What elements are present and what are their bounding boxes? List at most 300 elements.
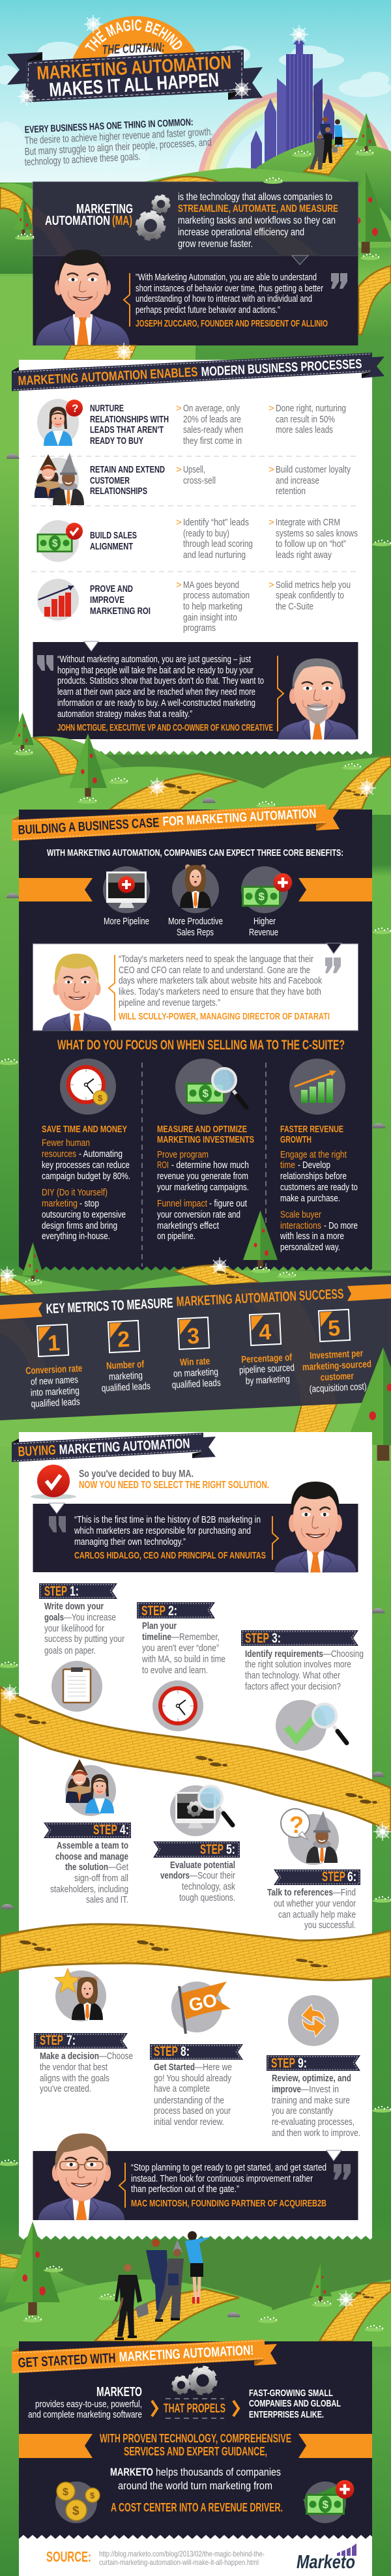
ribbon: step 2 [137,1602,215,1618]
definition text: is the technology that allows companies to [178,192,332,203]
metric 1 [23,1324,84,1410]
step 9: Review, optimize, and [272,2073,351,2084]
ribbon: step 2: STEP [141,1603,166,1618]
row: nurture relationships: can result in 50% [276,414,335,425]
step 8: Get Started [154,2062,195,2073]
benefit: higher revenue: Higher [253,916,276,927]
column: measure and optimize: Funnel impact [157,1198,208,1209]
row: retain and extend: cross-sell [183,475,216,486]
traveller: tin man in gray suit [155,2240,184,2320]
text: marketo provides: provides easy-to-use, powerful, [35,2399,142,2410]
text: fast-growing companies: ENTERPRISES ALIKE. [249,2409,324,2420]
step 6: out whether your vendor [274,1898,356,1909]
column: save time and money [42,1124,130,1242]
row: prove and improve ROI: IMPROVE [90,594,124,606]
step 2: you aren't ever “done” [142,1643,219,1654]
metric 5: Investment per [310,1348,364,1362]
sparkles on title [18,15,308,106]
column: faster revenue growth: - Develop [298,1160,330,1171]
row: build sales alignment: BUILD SALES [90,530,137,541]
banner: building a business case [12,804,340,841]
row: nurture relationships: more sales leads [276,424,333,435]
row: retain and extend: > [176,464,182,475]
title: the curtain: THE CURTAIN: [102,40,165,57]
title: marketing automation: MARKETING AUTOMATION [36,52,232,84]
banner: get started: GET STARTED WITH [18,2350,116,2371]
column: measure and optimize: Prove program [157,1149,209,1160]
column: save time and money: campaign budget by 80%. [42,1171,130,1182]
benefit: more productive sales reps [168,864,223,938]
road connector [64,345,136,360]
quote text [74,1515,266,1561]
row: prove and improve ROI [37,579,351,634]
column: measure and optimize: - determine how much [171,1160,249,1171]
metric 4: pipeline sourced [239,1362,295,1376]
quote text: which marketers are responsible for purchasing and [74,1526,251,1536]
intro text: EVERY BUSINESS HAS ONE THING IN COMMON: [24,117,194,136]
column: save time and money: resources [42,1149,76,1160]
source url: curtain-marketing-automation-will-make-it-all-happen.html [99,2558,259,2567]
ribbon: step 4: 4: [120,1822,129,1837]
row: retain and extend: CUSTOMER [90,475,130,486]
step 4: sign-off from all [74,1873,128,1884]
column: faster revenue growth: interactions [280,1220,321,1231]
row: nurture relationships: 20% of leads are [183,414,241,425]
metric 4: by marketing [245,1373,290,1387]
icon: money under magnifier [175,1059,246,1115]
heading: key metrics [46,1287,344,1317]
step 5: tough questions. [179,1892,235,1903]
step 3: than technology. What other [245,1670,340,1681]
step 1 [39,1583,124,1712]
column: measure and optimize: MEASURE AND OPTIMIZE [157,1124,247,1135]
column: measure and optimize: MARKETING INVESTMENTS [157,1134,254,1145]
ribbon: step 8: 8: [181,2044,190,2059]
step 1: goals on paper. [44,1645,96,1656]
text: marketo helps: A COST CENTER INTO A REVENUE DRIVER. [111,2501,283,2514]
step 4: stakeholders, including [50,1884,128,1895]
row: nurture relationships: Done right, nurturing [276,403,346,414]
quote text: “This is the first time in the history of B2B marketing in [74,1515,261,1525]
panel: source footer [19,2535,372,2576]
icon: team [65,1759,116,1816]
landscape: rolling hills bottom [0,2221,391,2347]
intro text: technology to achieve these goals. [24,151,141,168]
step 2: —Remember, [171,1632,220,1643]
text: marketo helps: helps thousands of companies [156,2466,281,2478]
row: prove and improve ROI: process automation [183,590,250,601]
icon: witch and tin man [35,453,84,505]
tree overlap [345,1347,391,1461]
rainbow [199,93,391,190]
metric 1: 1 [47,1330,61,1356]
column: measure and optimize: your marketing campaigns. [157,1182,249,1193]
quote text: learn at their own pace and be reached when they need more [57,687,255,697]
step 5: Evaluate potential [170,1860,235,1871]
metric 3: qualified leads [171,1377,221,1391]
intro text [24,117,213,168]
ribbon: step 1: STEP [44,1584,67,1599]
quote text: “Without marketing automation, you are just guessing – just [57,654,251,665]
bracket [119,2163,125,2208]
metric 5 [300,1308,373,1395]
row: prove and improve ROI: programs [183,622,216,634]
text: that propels [164,2399,225,2418]
landscape: rolling hills 3 [0,1210,391,1304]
icon: woman with question [37,399,83,446]
step 7: Make a decision [40,2051,99,2062]
quote text: managing their own technology.” [74,1537,186,1547]
ribbon: step 5: 5: [226,1842,235,1857]
step 8: understanding of the [154,2095,224,2106]
bracket [124,273,130,327]
quote text: “Stop planning to get ready to get started, and get started [131,2163,326,2173]
text: proven technology [100,2432,291,2458]
step 4: Assemble a team to [57,1840,128,1851]
column: save time and money: - Automating [79,1149,123,1160]
icon: coins: $ [63,2487,68,2498]
panel: quote Carlos Hidalgo [33,1482,358,1572]
benefit: higher revenue: Revenue [249,927,278,938]
source url: http://blog.marketo.com/blog/2013/02/the-magic-behind-the- [99,2549,265,2558]
banner: buying marketing automation [12,1433,216,1462]
metric 2: marketing [109,1370,143,1383]
intro text: So you've decided to buy MA. [79,1469,194,1480]
bracket [278,656,283,731]
step 6: you successful. [304,1920,356,1931]
step 4 [44,1759,131,1905]
portrait: Joseph Zuccaro [36,250,130,345]
quote text: understanding of how to interact with an individual and [136,294,312,304]
ribbon: step 8 [150,2044,243,2060]
panel: business processes [12,353,384,755]
step 3: Identify requirements [245,1648,323,1660]
step 5 [153,1785,240,1903]
row: retain and extend: RETAIN AND EXTEND [90,464,165,475]
step 2: to evolve and learn. [142,1665,208,1676]
icon: gears [173,2368,215,2393]
definition text [178,192,338,250]
quote text: MAC MCINTOSH, FOUNDING PARTNER OF ACQUIREB2B [131,2198,326,2209]
icon: go flag: GO [187,1989,219,2015]
quote text: perhaps predict future behavior and actions." [136,305,280,315]
row: prove and improve ROI: the C-Suite [276,601,313,612]
banner: building a business case: FOR MARKETING AUTOMATION [162,806,317,829]
column: faster revenue growth: time [280,1160,295,1171]
step 9: training and make sure [272,2095,350,2106]
intro text [79,1469,269,1491]
panel: quote John McTigue [33,641,358,739]
row: build sales alignment [36,517,358,562]
icon: go flag [171,1982,231,2034]
traveller: woman in blue [185,2231,210,2304]
step 1: your likelihood for [44,1623,104,1634]
quote text: products. Statistics show that buyers don't do that. They want to [57,676,264,686]
metric 5: marketing-sourced [302,1358,371,1373]
step 6: can actually help make [278,1909,356,1920]
row: build sales alignment: Integrate with CRM [276,517,340,528]
road: diagonal brick road [0,1684,391,1841]
step 9: you are constantly [272,2105,333,2116]
ribbon: step 4 [44,1822,131,1838]
row: nurture relationships: sales-ready when [183,424,243,435]
quote text [119,954,330,1022]
icon: coins: $ [72,2504,80,2518]
metric 4: Percentage of [241,1352,293,1366]
ribbon: step 6: 6: [347,1869,356,1884]
column: save time and money: everything in-house. [42,1231,110,1242]
quote text: short instances of behavior over time, thus getting a better [136,284,323,294]
step 8: initial vendor review. [154,2116,224,2128]
ribbon: step 7: 7: [66,2033,76,2048]
travellers walking [112,2231,210,2339]
ribbon: step 1: 1: [70,1584,79,1599]
row: nurture relationships: > [268,403,274,414]
row: nurture relationships: RELATIONSHIPS WITH [90,414,169,425]
clouds [0,42,391,171]
benefit: more pipeline [103,866,150,927]
row: nurture relationships: READY TO BUY [90,435,143,446]
title: the magic behind: THE MAGIC BEHIND [85,20,182,51]
row: prove and improve ROI: to help marketing [183,601,242,612]
heading: marketing automation: (MA) [112,214,132,228]
metric 3: 3 [186,1324,200,1349]
column: save time and money: DIY (Do it Yourself) [42,1187,108,1198]
source url [99,2549,265,2567]
row: build sales alignment: leads right away [276,549,332,561]
text: marketo provides [28,2385,142,2420]
step 7: aligns with the goals [40,2073,109,2084]
row: build sales alignment: ALIGNMENT [90,541,133,552]
column: save time and money: marketing [42,1198,78,1209]
ribbon: step 6 [274,1869,360,1885]
step 3: the right solution involves more [245,1659,351,1670]
column: measure and optimize: ROI [157,1160,169,1171]
metric 5: (acquisition cost) [309,1381,367,1395]
row: prove and improve ROI: speak confidently to [276,590,344,601]
ribbon: step 1 [39,1583,117,1599]
quote mark [325,958,341,973]
side decorations [0,149,391,2166]
icon: gears [138,196,169,239]
tree right of metrics [345,1347,391,1461]
quote text: likes. Today's marketers need to ensure that they have both [119,986,321,997]
quote text: automation strategy makes that a reality.” [57,709,192,720]
step 4: choose and manage [55,1851,128,1862]
step 5: technology, ask [182,1881,235,1892]
portrait: Mac McIntosh [38,2133,124,2220]
step 3: —Choosing [323,1648,364,1660]
step 7: —Choose [99,2051,133,2062]
quote text: JOHN MCTIGUE, EXECUTIVE VP AND CO-OWNER OF KUNO CREATIVE [57,722,273,733]
column: faster revenue growth: personalized way. [280,1242,340,1253]
column: faster revenue growth: Engage at the right [280,1149,347,1160]
ribbon: step 9: STEP [271,2056,295,2071]
step 3 [241,1630,364,1751]
text: proven technology: SERVICES AND EXPERT GUIDANCE, [124,2445,267,2458]
icon: chevrons [152,2401,239,2416]
benefit: more productive sales reps: More Productive [168,916,223,927]
column: faster revenue growth: relationships before [280,1171,347,1182]
banner: buying marketing automation: MARKETING AUTOMATION [59,1436,190,1457]
quote text [131,2163,326,2209]
step 6: —Find [333,1887,356,1898]
step 9: improve [272,2084,301,2095]
step 8: —Here we [195,2062,232,2073]
top hills [0,139,391,274]
row: nurture relationships: LEADS THAT AREN'T [90,424,164,435]
metric 4 [237,1313,295,1387]
step 3: factors affect your decision? [245,1681,341,1692]
row: build sales alignment: and lead nurturing [183,549,246,561]
metric 2: 2 [117,1327,130,1352]
icon: clipboard [51,1661,102,1712]
column: faster revenue growth: GROWTH [280,1134,311,1145]
step 1: goals [44,1612,64,1623]
metric 1: of new names [31,1374,78,1388]
banner: get started [12,2339,277,2373]
quote text: hoping that people will take the bait and be ready to buy your [57,666,253,676]
row: prove and improve ROI: gain insight into [183,612,237,623]
intro text: The desire to achieve higher revenue and faster growth. [24,126,213,147]
column: faster revenue growth: make a purchase. [280,1193,340,1204]
row: prove and improve ROI: > [268,579,274,591]
text: marketo helps: around the world turn marketing from [118,2480,272,2492]
column: save time and money: design firms and bring [42,1220,117,1231]
meadow below metrics [0,1401,391,1447]
step 7: the vendor that best [40,2062,108,2073]
text: marketo provides: MARKETO [96,2385,142,2399]
column: measure and optimize: on pipeline. [157,1231,195,1242]
panel: building a business case [12,804,372,1270]
banner: marketing automation enables [12,353,384,391]
step 8: go! You should already [154,2073,231,2084]
column: save time and money: Fewer human [42,1137,90,1149]
quote text: information or are ready to buy. A well-constructed marketing [57,698,255,709]
row: prove and improve ROI: MA goes beyond [183,579,239,591]
step 7 [34,1969,133,2094]
text: fast-growing companies: COMPANIES AND GLOBAL [249,2398,341,2409]
source label: SOURCE: [46,2549,91,2565]
step 6 [267,1809,360,1931]
portrait: John McTigue [278,658,356,739]
quote mark [331,273,347,289]
text: marketo provides: and complete marketing software [28,2409,142,2420]
row: nurture relationships [37,399,346,446]
metric 4: 4 [258,1320,272,1345]
bracket [109,955,115,1021]
icon: monitor and magnifier [170,1785,233,1836]
column: save time and money: SAVE TIME AND MONEY [42,1124,127,1135]
banner: marketing automation enables: MARKETING AUTOMATION ENABLES [18,365,198,388]
quote mark [49,1516,66,1532]
row: nurture relationships: NURTURE [90,403,124,414]
step 9: —Invest in [301,2084,339,2095]
text: marketo helps: MARKETO [110,2466,153,2478]
ribbons: key metrics [0,1284,391,1319]
metric 1: into marketing [30,1385,80,1399]
icon: money stack [303,2480,354,2523]
icon: clock and coin [60,1059,116,1115]
row: prove and improve ROI: PROVE AND [90,583,133,594]
heading: marketing automation [45,202,133,228]
step 5: vendors [160,1870,190,1881]
column: measure and optimize: - figure out [209,1198,248,1209]
row: build sales alignment: Identify “hot” leads [183,517,249,528]
portrait: Will Scully-Power [42,954,111,1031]
logo: Marketo [297,2543,356,2573]
step 2: timeline [142,1632,171,1643]
row: retain and extend: Build customer loyalty [276,464,351,475]
row: build sales alignment: > [268,517,274,528]
ribbons [19,878,372,901]
metric 2: qualified leads [101,1381,151,1394]
quote text: “Today's marketers need to speak the language that their [119,954,313,965]
column: faster revenue growth [280,1124,358,1253]
text: proven technology: WITH PROVEN TECHNOLOGY, COMPREHENSIVE [100,2432,291,2445]
column: measure and optimize [157,1124,254,1242]
row: retain and extend [35,453,351,505]
definition text: increase operational efficiency and [178,227,304,238]
text: marketo helps [110,2466,283,2514]
row: retain and extend: and increase [276,475,319,486]
quote text: days where marketers talk about website hits and Facebook [119,975,322,986]
icon: coins: $ [90,2491,95,2500]
step 7: you've created. [40,2083,91,2094]
column: faster revenue growth: - Do more [324,1220,358,1231]
text: that propels: THAT PROPELS [164,2402,225,2416]
row: prove and improve ROI: > [176,579,182,591]
metric 5: 5 [327,1316,341,1341]
quote text: instead. Then look for continuous improvement rather [131,2174,313,2184]
step 5: —Scour their [190,1870,235,1881]
column: faster revenue growth: Scale buyer [280,1209,321,1220]
intro text: NOW YOU NEED TO SELECT THE RIGHT SOLUTION. [79,1480,269,1491]
step 8: process based on your [154,2105,231,2116]
ribbon: step 6: STEP [322,1869,345,1884]
icon: lion with star [55,1969,106,2021]
row: prove and improve ROI: Solid metrics help you [276,579,351,591]
metric 2 [98,1320,151,1394]
icon: clock [152,1680,203,1731]
step 9 [267,1995,360,2139]
panel: quote Will Scully-Power [33,943,358,1031]
benefit: higher revenue [241,866,292,938]
icon: growth bars [289,1059,345,1115]
column: save time and money: - stop [80,1198,99,1209]
quote text: "With Marketing Automation, you are able to understand [136,272,317,283]
row: retain and extend: RELATIONSHIPS [90,486,147,497]
row: nurture relationships: > [176,403,182,414]
benefit: more productive sales reps: Sales Reps [177,927,214,938]
bracket [272,1516,278,1560]
row: retain and extend: Upsell, [183,464,205,475]
ribbon: step 3 [241,1630,358,1646]
step 1: —You increase [64,1612,116,1623]
ribbon: step 3: STEP [245,1631,269,1646]
panel: get started [12,2339,372,2537]
ribbon: step 9: 9: [298,2056,307,2071]
landscape: rolling hills 2 [0,712,391,815]
ribbon: step 5 [153,1841,240,1858]
ribbon: step 2: 2: [168,1603,177,1618]
step 2: Plan your [142,1620,177,1632]
ribbon: step 9 [267,2055,360,2071]
column: measure and optimize: revenue you generate from [157,1171,248,1182]
yellow brick road top [0,139,391,334]
ribbon: step 4: STEP [93,1822,117,1837]
row: build sales alignment: to follow up on “hot” [276,538,346,549]
